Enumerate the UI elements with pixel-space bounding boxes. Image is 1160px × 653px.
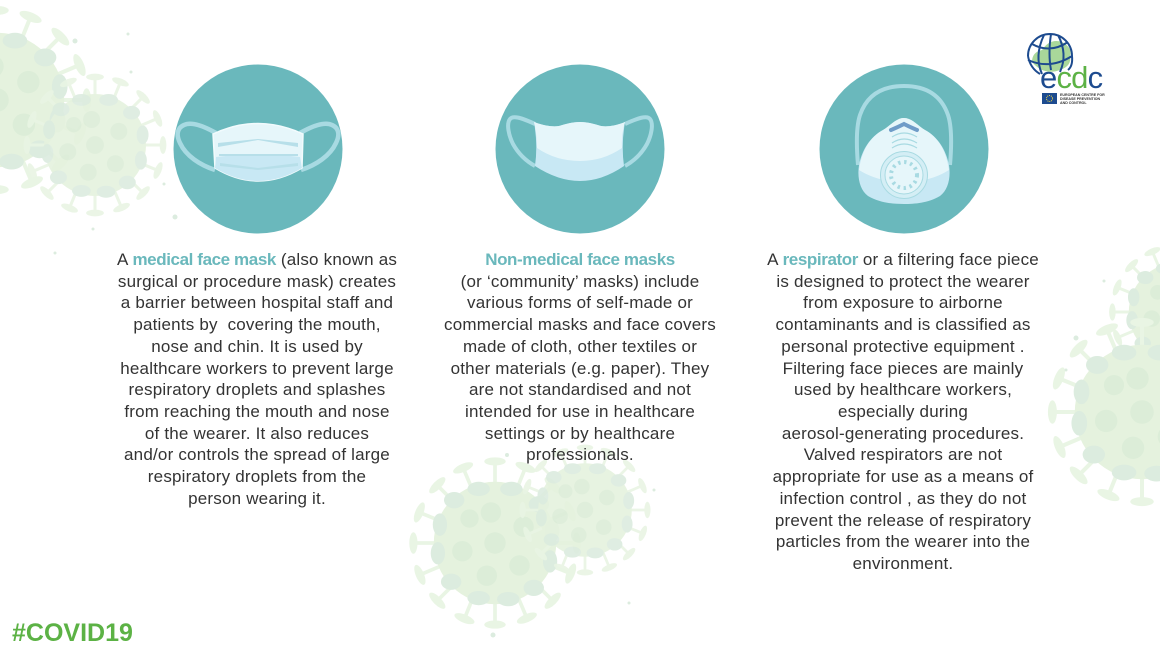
text block: respirator: environment. xyxy=(853,554,953,573)
logo caption: EUROPEAN CENTRE FOR xyxy=(1060,93,1105,97)
text block: respirator: prevent the release of respiratory xyxy=(775,511,1031,530)
text block: medical face mask: A medical face mask (also known as xyxy=(117,250,397,269)
virus top left large xyxy=(0,6,91,194)
hashtag: #COVID19 xyxy=(12,619,133,647)
text block: respirator: is designed to protect the wearer xyxy=(776,272,1030,291)
virus bottom centre small xyxy=(519,444,651,576)
text block: medical face mask: person wearing it. xyxy=(188,489,326,508)
text block: respirator: personal protective equipment . xyxy=(781,337,1025,356)
logo EU flag xyxy=(1042,93,1057,104)
text block: non-medical face masks: intended for use in healthcare xyxy=(465,402,695,421)
logo globe xyxy=(1028,34,1072,78)
virus top left small xyxy=(24,74,166,216)
text block: medical face mask: healthcare workers to prevent large xyxy=(120,359,394,378)
text block: non-medical face masks: commercial masks and face covers xyxy=(444,315,716,334)
text block: medical face mask: nose and chin. It is used by xyxy=(151,337,363,356)
text block: medical face mask: surgical or procedure mask) creates xyxy=(118,272,396,291)
text block: medical face mask: of the wearer. It also reduces xyxy=(145,424,369,443)
text block: non-medical face masks xyxy=(444,250,716,464)
text block: respirator: particles from the wearer into the xyxy=(776,532,1030,551)
text block: respirator: aerosol-generating procedures. xyxy=(782,424,1024,443)
text block: non-medical face masks: other materials (e.g. paper). They xyxy=(451,359,709,378)
text block: respirator: infection control , as they do not xyxy=(780,489,1026,508)
virus bottom centre large xyxy=(409,457,581,629)
text block: respirator: from exposure to airborne xyxy=(803,293,1003,312)
text block: non-medical face masks: made of cloth, other textiles or xyxy=(463,337,697,356)
text block: medical face mask: from reaching the mouth and nose xyxy=(124,402,390,421)
text block: non-medical face masks: are not standardised and not xyxy=(469,380,691,399)
virus right upper xyxy=(1109,243,1160,381)
text block: respirator: Valved respirators are not xyxy=(804,445,1002,464)
text block: non-medical face masks: professionals. xyxy=(526,445,634,464)
logo caption: DISEASE PREVENTION xyxy=(1060,97,1101,101)
icon: non-medical face mask xyxy=(496,64,664,234)
text block: respirator: contaminants and is classified as xyxy=(775,315,1031,334)
text block: medical face mask: respiratory droplets and splashes xyxy=(128,380,386,399)
text block: medical face mask: respiratory droplets from the xyxy=(148,467,366,486)
text block: respirator: especially during xyxy=(838,402,968,421)
text block: medical face mask xyxy=(117,250,397,508)
text block: respirator: used by healthcare workers, xyxy=(794,380,1012,399)
logo wordmark: ecdc xyxy=(1040,60,1103,95)
icon: respirator xyxy=(820,64,988,234)
text block: non-medical face masks: various forms of self-made or xyxy=(467,293,693,312)
text block: medical face mask: a barrier between hospital staff and xyxy=(121,293,393,312)
text block: respirator: A respirator or a filtering face piece xyxy=(767,250,1039,269)
text block: non-medical face masks: settings or by healthcare xyxy=(485,424,675,443)
virus right lower xyxy=(1048,318,1160,506)
text block: medical face mask: patients by covering the mouth, xyxy=(133,315,381,334)
icon: medical face mask xyxy=(174,64,342,234)
logo caption: AND CONTROL xyxy=(1060,101,1087,105)
text block: respirator: appropriate for use as a means of xyxy=(773,467,1033,486)
text block: non-medical face masks: (or ‘community’ masks) include xyxy=(461,272,699,291)
text block: medical face mask: and/or controls the spread of large xyxy=(124,445,390,464)
text block: non-medical face masks: Non-medical face masks xyxy=(485,250,675,269)
text block: respirator: Filtering face pieces are mainly xyxy=(783,359,1023,378)
text block: respirator xyxy=(767,250,1039,573)
logo: ECDC xyxy=(1028,34,1105,105)
